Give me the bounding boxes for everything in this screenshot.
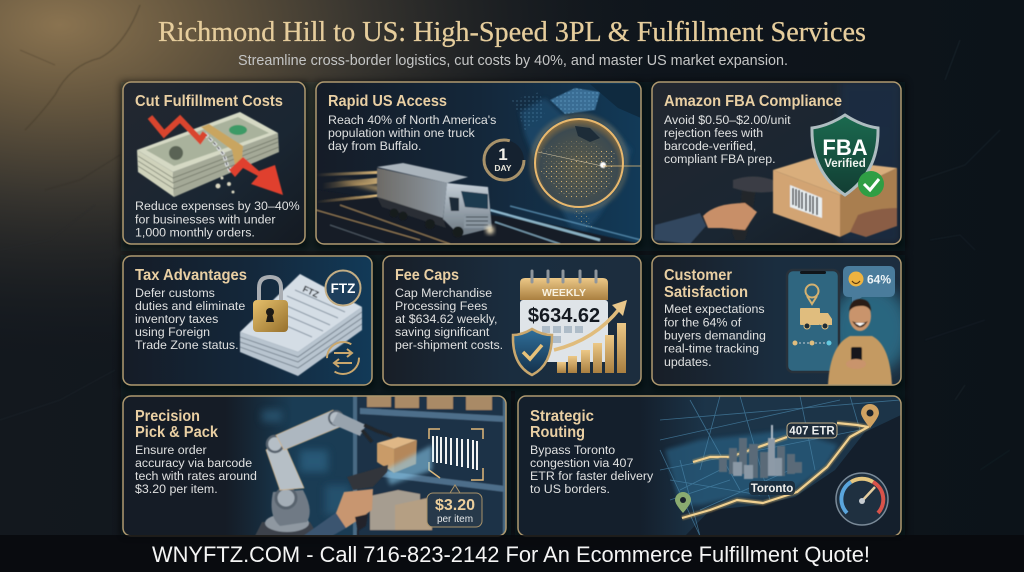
text: customer satisfaction: for the 64% of [664,316,742,330]
panel: amazon fba compliance [652,82,901,244]
heading: strategic routing: Strategic [530,408,594,425]
icon: speed gauge [836,473,888,525]
text: strategic routing: congestion via 407 [530,456,633,470]
text: rapid us access: population within one truck [328,126,476,140]
text: amazon fba compliance: barcode-verified, [664,139,756,153]
icon: 1 day badge: DAY [494,163,512,173]
panel border: customer satisfaction [652,256,901,385]
text: rapid us access: Reach 40% of North America's [328,113,496,127]
text: precision pick and pack: tech with rates around [135,469,257,483]
panel border: rapid us access [316,82,641,244]
panel shadows [121,82,905,538]
footer banner [0,535,1024,572]
icon: FBA verified shield [812,115,884,197]
icon: cash stack with falling red arrow [137,112,283,197]
text: fee caps [395,286,503,352]
text: amazon fba compliance [664,113,791,166]
heading: precision pick and pack [136,410,218,437]
text: cut fulfillment costs [135,199,300,240]
icon: FTZ document stack [240,274,362,376]
icon: exchange arrows [327,342,359,374]
panel: fee caps [383,256,641,385]
icon: FTZ badge [326,270,360,306]
map: toronto road network [640,396,901,536]
footer call to action: WNYFTZ.COM - Call 716-823-2142 For An Ecommerce Fulfillment Quote! [152,542,870,567]
text: strategic routing: to US borders. [530,482,610,496]
icon: FBA verified shield: Verified [824,158,866,170]
icon: smiling customer [828,299,892,385]
icon: FBA verified shield: FBA [822,135,868,160]
icon: weekly calendar [520,271,608,362]
icon: toronto skyline [719,425,802,479]
panel border: strategic routing [518,396,901,536]
panel: precision pick and pack [123,396,506,536]
panel: strategic routing [518,396,901,536]
text: precision pick and pack: $3.20 per item. [135,482,218,496]
callout: price per item [427,485,482,527]
icon: start pin [675,492,691,513]
icon: check shield [513,329,552,375]
heading: precision pick and pack: Pick & Pack [135,424,218,441]
text: customer satisfaction [664,302,766,369]
icon: robot arm [255,410,392,536]
panel: rapid US access [316,82,641,244]
title: Richmond Hill to US: High-Speed 3PL & Fulfillment Services [158,17,866,48]
heading: precision pick and pack: Precision [135,408,200,425]
callout: 64% speech bubble: 64% [867,272,891,286]
panel border: precision pick and pack [123,396,506,536]
text: cut fulfillment costs: Reduce expenses by 30–40% [135,199,300,213]
callout: price per item: per item [437,514,473,525]
icon: end pin [861,404,879,428]
icon: FTZ badge: FTZ [331,281,355,296]
heading: fee caps: Fee Caps [395,267,459,284]
heading: customer satisfaction: Satisfaction [664,284,748,301]
text: amazon fba compliance: Avoid $0.50–$2.00/unit [664,113,791,127]
icon: weekly calendar: $634.62 [528,305,600,327]
text: strategic routing: Bypass Toronto [530,443,615,457]
text: tax advantages: inventory taxes [135,312,218,326]
text: customer satisfaction: buyers demanding [664,328,766,342]
text: fee caps: Processing Fees [395,299,487,313]
icon: FTZ document stack: FTZ [301,284,321,300]
heading: customer satisfaction: Customer [664,267,732,284]
text: rapid us access [328,113,496,153]
text: customer satisfaction: updates. [664,355,712,369]
text: precision pick and pack: Ensure order [135,443,207,457]
text: fee caps: at $634.62 weekly, [395,312,497,326]
road and speed lines [316,172,641,244]
icon: hand with barcode scanner [654,176,778,244]
text: rapid us access: day from Buffalo. [328,139,421,153]
callout: 64% speech bubble [843,266,895,304]
text: tax advantages: duties and eliminate [135,299,245,313]
gold route via 407 ETR [682,423,868,518]
callout: price per item: $3.20 [435,497,475,514]
icon: phone with tracking [787,270,839,372]
panel: tax advantages [123,256,372,385]
icon: hand-held scanner [303,465,388,536]
text: tax advantages: Defer customs [135,286,215,300]
heading: rapid us access: Rapid US Access [328,93,447,110]
blurred warehouse backdrop [240,396,354,535]
icon: 1 day badge [484,140,524,180]
icon: weekly calendar: WEEKLY [542,287,586,299]
text: amazon fba compliance: compliant FBA prep. [664,152,776,166]
icon: parcel [377,437,417,473]
heading: amazon fba compliance: Amazon FBA Compliance [664,93,842,110]
text: tax advantages: Trade Zone status. [135,338,239,352]
text: fee caps: per-shipment costs. [395,338,503,352]
bar chart: rising fees savings [554,300,627,373]
text: precision pick and pack [135,443,257,496]
icon: cardboard box with barcode [773,158,897,237]
callout: 407 ETR label: 407 ETR [789,426,835,438]
heading: strategic routing [530,408,594,441]
heading: cut fulfillment costs: Cut Fulfillment Costs [135,93,283,110]
icon: truck [377,163,494,238]
text: customer satisfaction: real-time tracking [664,342,759,356]
heading: tax advantages: Tax Advantages [135,267,247,284]
text: cut fulfillment costs: 1,000 monthly orders. [135,226,255,240]
heading: strategic routing: Routing [530,424,585,441]
text: strategic routing [530,443,654,496]
text: cut fulfillment costs: for businesses with under [135,212,276,226]
icon: padlock [253,277,288,332]
text: tax advantages: using Foreign [135,325,210,339]
label: toronto: Toronto [751,483,793,495]
panel: cut fulfillment costs [123,82,305,244]
text: fee caps: Cap Merchandise [395,286,492,300]
text: fee caps: saving significant [395,325,490,339]
panel: customer satisfaction [652,256,910,385]
subtitle: Streamline cross-border logistics, cut costs by 40%, and master US market expansion. [238,53,788,69]
map: north america with one-day radius [512,84,641,232]
warehouse shelf with boxes [355,396,506,536]
icon: 1 day badge: 1 [498,145,508,164]
icon: glowing barcode [385,429,483,485]
text: tax advantages [135,286,245,352]
text: precision pick and pack: accuracy via barcode [135,456,252,470]
text: customer satisfaction: Meet expectations [664,302,765,316]
panel border: amazon fba [652,82,901,244]
text: strategic routing: ETR for faster delivery [530,469,654,483]
heading: customer satisfaction [664,269,748,297]
text: amazon fba compliance: rejection fees with [664,126,763,140]
